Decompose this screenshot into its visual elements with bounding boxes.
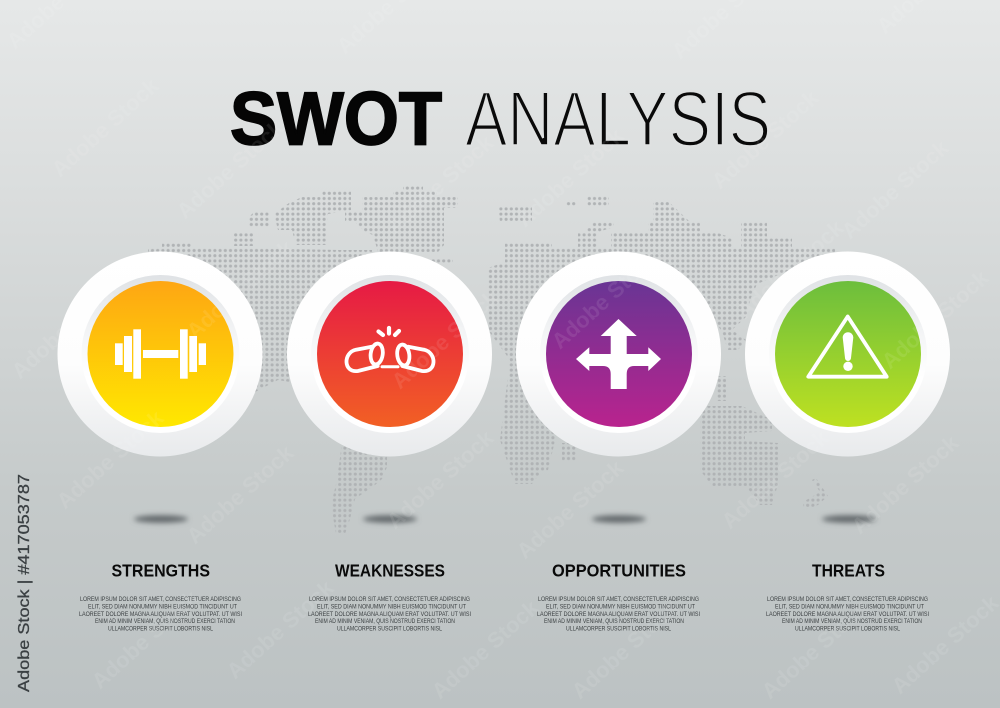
icon: three-way arrows [576, 319, 661, 389]
body text: ENIM AD MINIM VENIAM, QUIS NOSTRUD EXERCI TATION [95, 619, 235, 625]
body text: ELIT, SED DIAM NONUMMY NIBH EUISMOD TINCIDUNT UT [317, 604, 466, 610]
faint repeated stock overlay text: Adobe Stock [512, 455, 629, 564]
body text: ULLAMCORPER SUSCIPIT LOBORTIS NISL [337, 626, 443, 632]
vertical image id credit: Adobe Stock | #417053787 [16, 474, 33, 692]
body text: ELIT, SED DIAM NONUMMY NIBH EUISMOD TINCIDUNT UT [775, 604, 924, 610]
circle badge [745, 252, 950, 456]
faint repeated stock overlay text: Adobe Stock [7, 275, 124, 384]
body text [537, 597, 700, 632]
faint repeated stock overlay text: Adobe Stock [172, 115, 289, 224]
faint repeated stock overlay text: Adobe Stock [52, 405, 169, 514]
faint repeated stock overlay text: Adobe Stock [182, 235, 299, 344]
panel: opportunities [516, 252, 721, 632]
title [230, 74, 771, 162]
body text [766, 597, 929, 632]
body text: LOREM IPSUM DOLOR SIT AMET, CONSECTETUER ADIPISCING [767, 597, 928, 603]
floating shadow [592, 515, 646, 523]
circle badge [58, 252, 262, 456]
body text: ELIT, SED DIAM NONUMMY NIBH EUISMOD TINCIDUNT UT [88, 604, 237, 610]
faint repeated stock overlay text: Adobe Stock [877, 265, 994, 374]
body text: LOREM IPSUM DOLOR SIT AMET, CONSECTETUER ADIPISCING [309, 597, 470, 603]
faint repeated stock overlay text: Adobe Stock [182, 440, 299, 549]
body text: ULLAMCORPER SUSCIPIT LOBORTIS NISL [108, 626, 214, 632]
body text: LOREM IPSUM DOLOR SIT AMET, CONSECTETUER ADIPISCING [538, 597, 699, 603]
panel: weaknesses [287, 252, 492, 632]
heading: STRENGTHS [112, 560, 210, 580]
body text: LAOREET DOLORE MAGNA ALIQUAM ERAT VOLUTPAT. UT WISI [766, 612, 929, 618]
body text: LAOREET DOLORE MAGNA ALIQUAM ERAT VOLUTPAT. UT WISI [79, 612, 242, 618]
faint repeated stock overlay text: Adobe Stock [887, 590, 1000, 699]
body text: ENIM AD MINIM VENIAM, QUIS NOSTRUD EXERCI TATION [315, 619, 455, 625]
faint repeated stock overlay text: Adobe Stock [387, 285, 504, 394]
panel: threats [745, 252, 950, 632]
faint repeated stock overlay text: Adobe Stock [547, 245, 664, 354]
circle badge [287, 252, 492, 456]
icon: dumbbell [115, 329, 206, 379]
heading: THREATS [812, 560, 885, 580]
faint repeated stock overlay text: Adobe Stock [757, 595, 874, 704]
faint repeated stock overlay text: Adobe Stock [382, 425, 499, 534]
panel: strengths [58, 252, 262, 632]
body text: ENIM AD MINIM VENIAM, QUIS NOSTRUD EXERCI TATION [544, 619, 684, 625]
faint repeated stock overlay text: Adobe Stock [512, 123, 629, 232]
body text [79, 597, 242, 632]
body text: LOREM IPSUM DOLOR SIT AMET, CONSECTETUER ADIPISCING [80, 597, 241, 603]
floating shadow [822, 515, 876, 523]
body text: LAOREET DOLORE MAGNA ALIQUAM ERAT VOLUTPAT. UT WISI [537, 612, 700, 618]
faint repeated stock overlay text: Adobe Stock [732, 215, 849, 324]
icon: warning triangle [808, 316, 887, 377]
heading: WEAKNESSES [335, 560, 445, 580]
faint repeated stock overlay text: Adobe Stock [847, 430, 964, 539]
title: SWOT: SWOT [230, 76, 442, 160]
circle badge [516, 252, 721, 456]
faint repeated stock overlay text: Adobe Stock [567, 595, 684, 704]
body text: ELIT, SED DIAM NONUMMY NIBH EUISMOD TINCIDUNT UT [546, 604, 695, 610]
body text [308, 597, 471, 632]
faint repeated stock overlay text: Adobe Stock [87, 585, 204, 694]
faint repeated stock overlay text: Adobe Stock [47, 73, 164, 182]
body text: ENIM AD MINIM VENIAM, QUIS NOSTRUD EXERCI TATION [782, 619, 922, 625]
floating shadow [363, 515, 417, 523]
body text: ULLAMCORPER SUSCIPIT LOBORTIS NISL [566, 626, 672, 632]
faint repeated stock overlay text: Adobe Stock [707, 85, 824, 194]
title: ANALYSIS: ANALYSIS [465, 74, 771, 162]
faint repeated stock overlay text: Adobe Stock [837, 135, 954, 244]
faint repeated stock overlay text: Adobe Stock [427, 595, 544, 704]
floating shadow [134, 515, 188, 523]
heading: OPPORTUNITIES [552, 560, 686, 580]
faint repeated stock overlay text: Adobe Stock [382, 130, 499, 239]
icon: broken chain [346, 328, 434, 371]
faint repeated stock overlay text: Adobe Stock [222, 575, 339, 684]
body text: ULLAMCORPER SUSCIPIT LOBORTIS NISL [795, 626, 901, 632]
body text: LAOREET DOLORE MAGNA ALIQUAM ERAT VOLUTPAT. UT WISI [308, 612, 471, 618]
faint repeated stock overlay text: Adobe Stock [717, 425, 834, 534]
dotted world map [140, 180, 840, 540]
